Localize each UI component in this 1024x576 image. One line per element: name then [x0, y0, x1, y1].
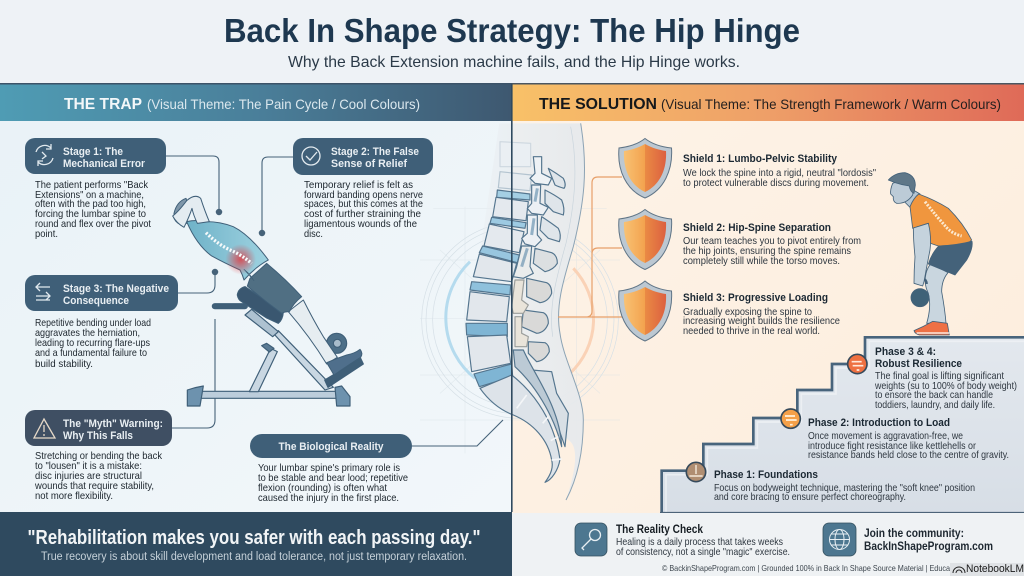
text: reality check: The Reality Check [616, 524, 704, 536]
text: stage 1 body: Extensions" on a machine, [35, 190, 144, 201]
bottom right strip [512, 513, 1024, 576]
callout: myth warning [25, 410, 172, 446]
text: phase 2: Phase 2: Introduction to Load [808, 417, 950, 429]
heading: the trap [0, 83, 512, 121]
text: biological reality body: Your lumbar spine's primary role is [258, 463, 400, 474]
footer source line: © BackinShapeProgram.com | Grounded 100% in Back In Shape Source Material | Educa [662, 563, 950, 573]
text: biological reality body: flexion (rounding) is often what [258, 483, 387, 494]
header band [0, 0, 1024, 84]
icon: shield [619, 210, 672, 270]
icon: opposing arrows [36, 283, 50, 300]
heading: the solution: THE SOLUTION [539, 96, 657, 113]
icon: key [575, 523, 607, 556]
myth warning connector [172, 319, 215, 428]
biological reality connector [412, 420, 503, 446]
shield 1: to protect vulnerable discs during movement. [683, 178, 869, 189]
text: phase 3 and 4: The final goal is lifting significant [875, 371, 1004, 382]
callout: myth warning: Why This Falls [63, 430, 133, 442]
text: stage 3 body: leading to recurring flare-ups [35, 338, 150, 349]
callout: stage 2 [293, 138, 433, 175]
text: biological reality body: caused the injury in the first place. [258, 493, 399, 504]
text: stage 3 body: build stability. [35, 359, 93, 370]
shield 1: Shield 1: Lumbo-Pelvic Stability [683, 153, 838, 165]
callout: stage 3 [25, 275, 178, 311]
text: reality check [616, 524, 790, 558]
icon: phase 3 marker [848, 354, 867, 374]
text: stage 3 body: Repetitive bending under load [35, 318, 151, 329]
callout: stage 3: Consequence [63, 295, 129, 307]
text: phase 2: Once movement is aggravation-free, we [808, 431, 963, 442]
text: stage 2 body: cost of further straining the [304, 209, 421, 220]
text: phase 2 [808, 417, 1009, 461]
shield 3: Shield 3: Progressive Loading [683, 292, 828, 304]
text: stage 2 body: ligamentous wounds of the [304, 219, 417, 230]
text: myth warning body: to "lousen" it is a mistake: [35, 461, 142, 472]
callout: myth warning: The "Myth" Warning: [63, 418, 163, 430]
heading: the solution [512, 83, 1024, 121]
icon: back extension machine with figure [173, 196, 363, 406]
text: stage 1 body: The patient performs "Back [35, 180, 149, 191]
text: reality check: Healing is a daily process that takes weeks [616, 537, 783, 548]
icon: shield [619, 138, 672, 198]
text: stage 3 body: aggravates the herniation, [35, 328, 140, 339]
text: stage 2 body: forward banding opens nerve [304, 190, 423, 201]
text: phase 3 and 4: toddiers, laundry, and daily life. [875, 400, 995, 411]
icon: hip hinge figure with kettlebell [888, 173, 972, 335]
icon: warning triangle [34, 419, 55, 438]
text: stage 2 body: disc. [304, 229, 323, 240]
shield 2: completely still while the torso moves. [683, 256, 840, 267]
shield 3: Gradually exposing the spine to [683, 307, 812, 318]
text: phase 3 and 4: to ensore the back can handle [875, 390, 993, 401]
shield 1 [619, 138, 876, 198]
text: myth warning body: wounds that require stability, [34, 481, 154, 492]
text: phase 1: and core bracing to ensure perfect choreography. [714, 492, 906, 503]
text: stage 2 body: Temporary relief is felt as [304, 180, 413, 191]
text: stage 3 body [35, 318, 151, 370]
text: stage 3 body: and a fundamental failure to [35, 348, 147, 359]
central spine illustration [420, 123, 620, 500]
quote banner: True recovery is about skill development and load tolerance, not just temporary relaxation. [41, 551, 467, 563]
stage 1 connector [166, 156, 222, 215]
icon: phase 1 marker [686, 462, 706, 482]
quote banner: "Rehabilitation makes you safer with each passing day." [28, 527, 480, 549]
panel: the trap background [0, 84, 512, 512]
shield 2: the hip joints, ensuring the spine remains [683, 246, 851, 257]
shield 2: Our team teaches you to pivot entirely from [683, 236, 861, 247]
quote banner [0, 512, 512, 576]
heading: the solution: (Visual Theme: The Strength Framework / Warm Colours) [661, 96, 1001, 112]
text: stage 1 body: round and flex over the pivot [35, 219, 151, 230]
shield 2: Shield 2: Hip-Spine Separation [683, 222, 831, 234]
text: phase 1: Phase 1: Foundations [714, 469, 818, 481]
shield 3: increasing weight builds the resilience [683, 316, 840, 327]
shield 3 [619, 281, 840, 341]
text: stage 2 body: spaces, but this comes at the [304, 199, 423, 210]
subtitle: Why the Back Extension machine fails, and the Hip Hinge works. [288, 54, 740, 71]
text: phase 1 [714, 469, 975, 503]
callout: stage 2: Sense of Relief [331, 158, 407, 170]
shield 3: needed to thrive in the real world. [683, 326, 820, 337]
text: join the community: BackInShapeProgram.com [864, 539, 993, 553]
shield 2 [619, 210, 861, 270]
text: reality check: of consistency, not a single "magic" exercise. [616, 547, 790, 558]
callout: stage 1: Mechanical Error [63, 158, 146, 170]
text: stage 2 body [304, 180, 423, 240]
callout: stage 1: Stage 1: The [63, 146, 123, 158]
stage 2 connector [259, 157, 293, 236]
text: myth warning body: disc injuries are structural [35, 471, 142, 482]
text: phase 3 and 4: Robust Resilience [875, 358, 962, 370]
heading: the trap: (Visual Theme: The Pain Cycle / Cool Colours) [147, 96, 420, 112]
icon: phase 2 marker [781, 409, 800, 428]
divider between panels [511, 84, 513, 512]
icon: check circle [302, 147, 320, 165]
text: myth warning body: Stretching or bending the back [35, 451, 163, 462]
icon: shield [619, 281, 672, 341]
text: join the community [864, 526, 993, 553]
text: phase 1: Focus on bodyweight technique, mastering the "soft knee" position [714, 483, 975, 494]
text: join the community: Join the community: [864, 526, 964, 540]
text: biological reality body: to be stable and bear lood; repetitive [258, 473, 408, 484]
title: Back In Shape Strategy: The Hip Hinge [224, 12, 800, 49]
callout: stage 3: Stage 3: The Negative [63, 283, 169, 295]
text: stage 1 body: often with the pad too high, [35, 199, 146, 210]
text: myth warning body [34, 451, 163, 502]
shield 1: We lock the spine into a rigid, neutral "lordosis" [683, 168, 876, 179]
panel: the solution background [512, 84, 1024, 513]
orange connectors to shields [558, 177, 622, 317]
text: stage 1 body [35, 180, 151, 240]
text: biological reality body [258, 463, 408, 504]
text: stage 1 body: forcing the lumbar spine to [35, 209, 146, 220]
callout: stage 1 [25, 138, 166, 174]
stair chart [660, 337, 1024, 513]
stage 3 connector [178, 269, 218, 293]
callout: stage 2: Stage 2: The False [331, 146, 419, 158]
heading: the trap: THE TRAP [64, 96, 142, 113]
text: myth warning body: not more flexibility. [35, 491, 113, 502]
icon: globe [823, 523, 856, 556]
callout: biological reality [250, 434, 412, 458]
text: phase 3 and 4 [874, 346, 1017, 411]
text: phase 3 and 4: Phase 3 & 4: [875, 346, 936, 358]
icon: cycle arrows [36, 144, 53, 166]
callout: biological reality: The Biological Reality [278, 441, 384, 453]
text: phase 2: introduce fight resistance like kettlehells or [808, 441, 976, 452]
text: stage 1 body: point. [35, 229, 58, 240]
